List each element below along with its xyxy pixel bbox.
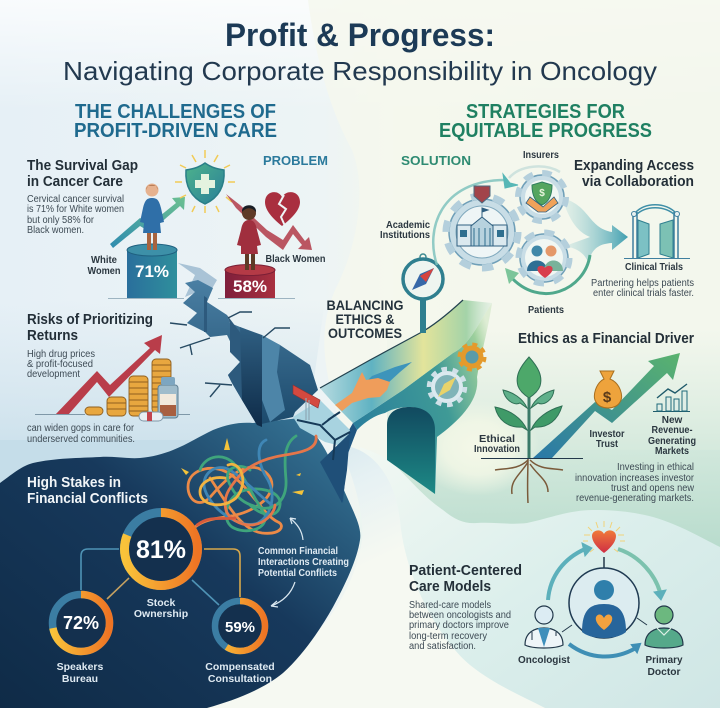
panel: expanding access bbox=[380, 150, 694, 316]
text: partnering description bbox=[591, 278, 694, 299]
text: ethics description: innovation increases investor bbox=[575, 473, 695, 484]
panel: ethics as a financial driver bbox=[474, 331, 696, 504]
pedestal: black women 58%: 58% bbox=[233, 277, 267, 296]
connector lines to patient bbox=[562, 618, 647, 632]
text: patient-centered description: Shared-care models bbox=[409, 600, 491, 611]
icon: insurers gear: $ bbox=[539, 188, 545, 199]
label: solution: SOLUTION bbox=[401, 153, 471, 168]
icon: ethical innovation plant bbox=[481, 357, 583, 503]
heading: challenges: PROFIT-DRIVEN CARE bbox=[74, 120, 277, 142]
icon: broken road sign bbox=[293, 385, 320, 420]
text: risks description: development bbox=[27, 369, 80, 380]
label: academic institutions: Academic bbox=[386, 220, 430, 231]
label: speakers bureau: Speakers bbox=[57, 661, 104, 673]
donut: compensated consultation 59% bbox=[215, 601, 265, 651]
icon: clinical trials gate bbox=[624, 205, 690, 258]
text: ethics description: trust and opens new bbox=[611, 483, 695, 494]
donut: stock ownership 81%: 81% bbox=[136, 536, 186, 564]
heading: survival gap bbox=[27, 158, 138, 190]
text: risks consequence bbox=[27, 423, 135, 445]
donut: stock ownership 81% bbox=[124, 512, 198, 586]
icon: oncologist bbox=[525, 606, 563, 648]
icon: falling red arrow bbox=[226, 194, 312, 250]
panel: survival gap bbox=[27, 150, 326, 298]
callout: common financial interactions: Common Financial bbox=[258, 545, 338, 557]
icon: rising red arrow bbox=[55, 335, 162, 415]
panel: patient-centered care bbox=[409, 521, 683, 678]
text: survival description: is 71% for White women bbox=[27, 204, 124, 215]
heading: expanding access: Expanding Access bbox=[574, 158, 694, 174]
bridge: balancing ethics and outcomes bbox=[320, 300, 492, 503]
text: risks description: & profit-focused bbox=[27, 359, 93, 370]
label: new revenue markets: Revenue- bbox=[652, 425, 692, 436]
heading: risks bbox=[27, 312, 153, 344]
label: white women bbox=[88, 255, 120, 277]
icon: compass signpost bbox=[403, 254, 443, 333]
text: survival description bbox=[27, 194, 124, 236]
icon: mini bar chart bbox=[653, 384, 690, 412]
arc arrows around gears bbox=[433, 166, 590, 294]
arrow: callout to donut bbox=[271, 582, 295, 607]
text: survival description: Cervical cancer survival bbox=[27, 194, 124, 205]
text: survival description: Black women. bbox=[27, 225, 84, 236]
icon: rising green arrow bbox=[110, 197, 185, 248]
icon: glowing heart bbox=[583, 521, 625, 568]
heading: strategies: STRATEGIES FOR bbox=[466, 101, 625, 123]
label: black women: Black Women bbox=[266, 254, 326, 265]
heading: patient-centered bbox=[409, 563, 522, 595]
label: new revenue markets: New bbox=[662, 415, 683, 426]
figure: white woman bbox=[140, 184, 164, 250]
label: new revenue markets bbox=[648, 415, 696, 457]
arrow: callout to knot bbox=[290, 518, 303, 540]
callout: common financial interactions: Interactions Creating bbox=[258, 556, 349, 568]
label: stock ownership: Ownership bbox=[134, 608, 188, 620]
callout: common financial interactions: Potential Conflicts bbox=[258, 567, 337, 579]
figure: black woman bbox=[237, 205, 261, 270]
label: speakers bureau bbox=[57, 661, 104, 685]
panel: financial conflicts bbox=[27, 436, 349, 685]
heading: risks: Risks of Prioritizing bbox=[27, 312, 153, 328]
icon: money bag: $ bbox=[603, 389, 612, 406]
label: white women: White bbox=[91, 255, 117, 266]
icon: primary doctor bbox=[645, 606, 683, 648]
label: balancing ethics and outcomes bbox=[326, 298, 404, 341]
heading: patient-centered: Care Models bbox=[409, 579, 491, 595]
label: problem: PROBLEM bbox=[263, 153, 328, 168]
label: speakers bureau: Bureau bbox=[62, 673, 98, 685]
label: white women: Women bbox=[88, 266, 120, 277]
label: compensated consultation: Compensated bbox=[205, 661, 275, 673]
background: pale river swoosh bbox=[200, 445, 545, 708]
icon: medicine vial bbox=[158, 377, 178, 418]
donut: compensated consultation 59%: 59% bbox=[225, 619, 255, 636]
pedestal: white women 71%: 71% bbox=[135, 262, 169, 281]
text: partnering description: Partnering helps patients bbox=[591, 278, 694, 289]
heading: patient-centered: Patient-Centered bbox=[409, 563, 522, 579]
icon: patient in circle bbox=[569, 568, 639, 638]
heading: expanding access: via Collaboration bbox=[582, 174, 694, 190]
heading: high stakes: High Stakes in bbox=[27, 474, 121, 491]
donut: speakers bureau 72%: 72% bbox=[63, 613, 99, 633]
label: ethical innovation: Ethical bbox=[479, 434, 515, 445]
label: ethical innovation bbox=[474, 434, 520, 455]
label: investor trust bbox=[590, 429, 625, 450]
icon: money bag bbox=[594, 371, 622, 408]
icon: coin stacks bbox=[85, 359, 171, 416]
title: Profit & Progress: bbox=[225, 17, 495, 53]
text: risks consequence: underserved communities. bbox=[27, 434, 135, 445]
text: risks description: High drug prices bbox=[27, 349, 95, 360]
ground line bbox=[35, 414, 190, 416]
arrows: care cycle bbox=[548, 543, 666, 657]
icon: orange gear bbox=[460, 344, 484, 370]
donut: speakers bureau 72% bbox=[52, 594, 110, 652]
label: stock ownership: Stock bbox=[147, 597, 175, 609]
label: stock ownership bbox=[134, 597, 188, 620]
icon: academic institution gear bbox=[446, 186, 518, 268]
heading: challenges bbox=[74, 101, 277, 142]
chasm crack bbox=[170, 263, 350, 503]
heading: expanding access bbox=[574, 158, 694, 190]
text: patient-centered description: primary doctors improve bbox=[409, 620, 509, 631]
label: ethical innovation: Innovation bbox=[474, 444, 520, 455]
text: risks consequence: can widen gops in care for bbox=[27, 423, 135, 434]
heading: strategies: EQUITABLE PROGRESS bbox=[439, 120, 652, 142]
label: patients: Patients bbox=[528, 305, 564, 316]
label: balancing ethics and outcomes: BALANCING bbox=[326, 298, 404, 313]
label: insurers: Insurers bbox=[523, 150, 559, 161]
label: compensated consultation: Consultation bbox=[208, 673, 272, 685]
background: dark conflict panel bbox=[0, 418, 360, 708]
label: new revenue markets: Markets bbox=[655, 446, 689, 457]
background: patient-care panel wash bbox=[360, 447, 720, 708]
heading: challenges: THE CHALLENGES OF bbox=[75, 101, 276, 123]
icon: broken heart bbox=[265, 192, 300, 226]
icon: tangled knot bbox=[181, 436, 316, 533]
heading: survival gap: in Cancer Care bbox=[27, 174, 123, 190]
label: investor trust: Trust bbox=[596, 439, 619, 450]
label: academic institutions: Institutions bbox=[380, 230, 430, 241]
text: partnering description: enter clinical trials faster. bbox=[593, 288, 694, 299]
label: primary doctor bbox=[646, 655, 683, 678]
label: new revenue markets: Generating bbox=[648, 436, 696, 447]
heading: ethics driver: Ethics as a Financial Driver bbox=[518, 331, 694, 347]
heading: survival gap: The Survival Gap bbox=[27, 158, 138, 174]
label: balancing ethics and outcomes: ETHICS & bbox=[336, 312, 395, 327]
text: patient-centered description: between oncologists and bbox=[409, 610, 511, 621]
text: patient-centered description: long-term recovery bbox=[409, 631, 487, 642]
heading: high stakes: Financial Conflicts bbox=[27, 490, 148, 507]
label: clinical trials: Clinical Trials bbox=[625, 262, 683, 273]
pedestal: white women 71% bbox=[108, 244, 184, 298]
heading: risks: Returns bbox=[27, 328, 78, 344]
label: primary doctor: Doctor bbox=[648, 667, 681, 678]
text: patient-centered description: and satisfaction. bbox=[409, 641, 476, 652]
label: primary doctor: Primary bbox=[646, 655, 683, 666]
icon: glowing shield bbox=[175, 150, 235, 213]
label: academic institutions bbox=[380, 220, 430, 241]
text: survival description: but only 58% for bbox=[27, 215, 95, 226]
label: investor trust: Investor bbox=[590, 429, 625, 440]
callout: common financial interactions bbox=[258, 545, 349, 579]
label: balancing ethics and outcomes: OUTCOMES bbox=[328, 326, 402, 341]
icon: blue compass gear bbox=[429, 369, 465, 405]
connector lines bbox=[81, 549, 240, 605]
text: ethics description bbox=[575, 462, 695, 504]
icon: bridge handshake bbox=[335, 362, 412, 411]
icon: pills bbox=[139, 412, 163, 421]
label: oncologist: Oncologist bbox=[518, 655, 571, 666]
pedestal: black women 58% bbox=[218, 264, 295, 298]
title: Navigating Corporate Responsibility in Oncology bbox=[63, 56, 657, 86]
text: ethics description: Investing in ethical bbox=[617, 462, 694, 473]
text: patient-centered description bbox=[409, 600, 511, 652]
heading: strategies bbox=[439, 101, 652, 142]
icon: insurers gear bbox=[518, 173, 566, 221]
arrow: flow to clinical trials bbox=[562, 198, 628, 262]
heading: high stakes bbox=[27, 474, 148, 507]
icon: rising growth arrow bbox=[533, 353, 680, 458]
panel: risks of prioritizing returns bbox=[27, 312, 190, 445]
title bbox=[63, 17, 657, 86]
icon: patients gear bbox=[518, 232, 570, 284]
text: ethics description: revenue-generating markets. bbox=[576, 493, 694, 504]
label: compensated consultation bbox=[205, 661, 275, 685]
text: risks description bbox=[27, 349, 95, 380]
